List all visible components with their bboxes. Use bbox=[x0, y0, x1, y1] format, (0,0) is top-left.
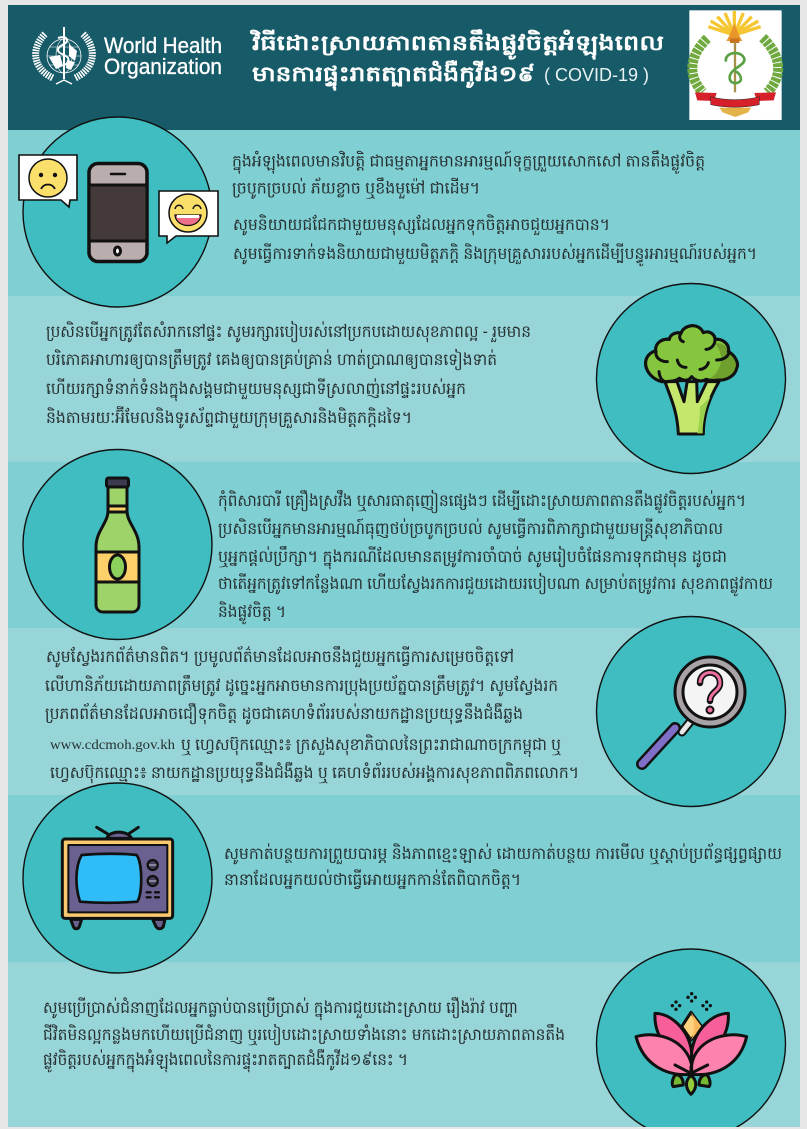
text block: get the facts: សូមស្វែងរកព័ត៌មានពិត។ ប្រមូលព័ត៌មានដែលអាចនឹងជួយអ្នកធ្វើការសម្រេចចិត្តទៅ bbox=[46, 645, 514, 668]
icon: Ministry of Health logo bbox=[689, 10, 782, 120]
text block: get the facts: ហ្វេសប៊ុកឈ្មោះ៖ នាយកដ្ឋានប្រយុទ្ធនឹងជំងឺឆ្លង ឬ គេហទំព័ររបស់អង្គការសុខភាពពិភពលោក។ bbox=[50, 761, 579, 784]
panel: talk to people bbox=[19, 117, 757, 307]
title: ( COVID-19 ) bbox=[544, 65, 649, 85]
title: វិធីដោះស្រាយភាពតានតឹងផ្លូវចិត្តអំឡុងពេល bbox=[249, 29, 664, 60]
panel: healthy lifestyle bbox=[46, 284, 786, 474]
text block: avoid alcohol: ឬអ្នកផ្តល់ប្រឹក្សា។ ក្នុងករណីដែលមានតម្រូវការចាំបាច់ សូមរៀបចំផែនការទុកជាមុន ដូចជា bbox=[218, 545, 727, 570]
text block: avoid alcohol: និងផ្លូវចិត្ត ។ bbox=[218, 601, 286, 625]
panel: limit media bbox=[23, 783, 782, 973]
text block: healthy lifestyle: ហើយរក្សាទំនាក់ទំនងក្នុងសង្គមជាមួយមនុស្សជាទីស្រលាញ់នៅផ្ទះរបស់អ្នក bbox=[46, 378, 466, 402]
text block: get the facts: www.cdcmoh.gov.kh bbox=[50, 738, 175, 753]
text block: get the facts: លើហានិភ័យដោយភាពត្រឹមត្រូវ ដូច្នេះអ្នកអាចមានការប្រុងប្រយ័ត្នបានត្រឹមត្រូវ។ សូមស្វែងរក bbox=[45, 674, 558, 697]
text block: use your skills: ជីវិតមិនល្អកន្លងមកហើយប្រើជំនាញ ឬរបៀបដោះស្រាយទាំងនោះ មកដោះស្រាយភាពតានតឹង bbox=[43, 1023, 565, 1046]
text block: healthy lifestyle: បរិភោគអាហារឲ្យបានត្រឹមត្រូវ គេងឲ្យបានគ្រប់គ្រាន់ ហាត់ប្រាណឲ្យបានទៀងទាត់ bbox=[46, 348, 497, 371]
icon: circle badge with television bbox=[23, 783, 212, 973]
panel: get the facts bbox=[45, 616, 786, 806]
text block: healthy lifestyle bbox=[46, 320, 531, 429]
text block: talk to people bbox=[232, 150, 757, 267]
text block: avoid alcohol bbox=[218, 489, 773, 625]
text block: talk to people: ច្របូកច្របល់ ភ័យខ្លាច ឬខឹងមួម៉ៅ ជាដើម។ bbox=[232, 176, 480, 200]
text block: talk to people: ក្នុងអំឡុងពេលមានវិបត្តិ ជាធម្មតាអ្នកមានអារម្មណ៍ទុក្ខព្រួយសោកសៅ តានតឹងផ្លូវចិត្ត bbox=[232, 150, 705, 174]
text block: get the facts: ឬ ហ្វេសប៊ុកឈ្មោះ៖ ក្រសួងសុខាភិបាលនៃព្រះរាជាណាចក្រកម្ពុជា ឬ bbox=[181, 734, 561, 758]
icon: sad face bubble bbox=[19, 155, 77, 207]
panel: use your skills bbox=[43, 949, 786, 1129]
text block: limit media bbox=[224, 842, 782, 890]
text block: talk to people: សូមនិយាយជជែកជាមួយមនុស្សដែលអ្នកទុកចិត្តអាចជួយអ្នកបាន។ bbox=[233, 214, 610, 236]
text: World Health Organization: Organization bbox=[104, 54, 222, 79]
icon: circle badge with magnifier bbox=[596, 616, 786, 806]
text: World Health Organization bbox=[104, 33, 222, 79]
text: World Health Organization: World Health bbox=[104, 33, 222, 58]
text block: use your skills: សូមប្រើប្រាស់ជំនាញដែលអ្នកធ្លាប់បានប្រើប្រាស់ ក្នុងការជួយដោះស្រាយ រឿងរ៉ាវ បញ្ហា bbox=[43, 996, 518, 1021]
text block: healthy lifestyle: និងតាមរយៈអ៊ីមែលនិងទូរស័ព្ទជាមួយក្រុមគ្រួសារនិងមិត្តភក្តិដទៃ។ bbox=[46, 406, 412, 429]
title: មានការផ្ទុះរាតត្បាតជំងឺកូវីដ១៩ bbox=[252, 60, 535, 91]
text block: use your skills: ផ្លូវចិត្តរបស់អ្នកក្នុងអំឡុងពេលនៃការផ្ទុះរាតត្បាតជំងឺកូវីដ១៩នេះ ។ bbox=[43, 1048, 408, 1073]
text block: avoid alcohol: កុំពិសារបារី គ្រឿងស្រវឹង ឬសារធាតុញៀនផ្សេងៗ ដើម្បីដោះស្រាយភាពតានតឹងផ្លូវចិត្តរបស់អ្នក។ bbox=[218, 489, 746, 514]
text block: use your skills bbox=[43, 996, 565, 1073]
text block: avoid alcohol: ប្រសិនបើអ្នកមានអារម្មណ៍ធុញថប់ច្របូកច្របល់ សូមធ្វើការពិភាក្សាជាមួយមន្រ្តីសុខាភិបាល bbox=[218, 518, 723, 542]
icon: smartphone bbox=[89, 164, 147, 262]
text block: healthy lifestyle: ប្រសិនបើអ្នកត្រូវតែសំរាកនៅផ្ទះ សូមរក្សារបៀបរស់នៅប្រកបដោយសុខភាពល្អ - រួមមាន bbox=[46, 320, 531, 343]
icon: happy face bubble bbox=[159, 191, 218, 243]
icon: circle badge with broccoli bbox=[596, 284, 786, 474]
text block: get the facts: ប្រភពព័ត៌មានដែលអាចជឿទុកចិត្ត ដូចជាគេហទំព័ររបស់នាយកដ្ឋានប្រយុទ្ធនឹងជំងឺឆ្លង bbox=[45, 702, 523, 725]
icon: circle badge with phone and chat bubbles bbox=[19, 117, 218, 307]
panel: header bbox=[8, 5, 800, 130]
text block: limit media: នានាដែលអ្នកយល់ថាធ្វើអោយអ្នកកាន់តែពិបាកចិត្ត។ bbox=[224, 869, 521, 890]
text block: talk to people: សូមធ្វើការទាក់ទងនិយាយជាមួយមិត្តភក្តិ និងក្រុមគ្រួសាររបស់អ្នកដើម្បីបន្ធូរអារម្មណ៍របស់អ្នក។ bbox=[233, 243, 757, 267]
text block: limit media: សូមកាត់បន្ថយការព្រួយបារម្ភ និងភាពខ្មេះឡាស់ ដោយកាត់បន្ថយ ការមើល ឬស្តាប់ប្រព័ន្ធផ្សព្វផ្សាយ bbox=[224, 842, 782, 865]
icon: circle badge with lotus bbox=[596, 949, 786, 1129]
icon: circle badge with bottle bbox=[23, 450, 212, 640]
text block: get the facts bbox=[45, 645, 579, 784]
icon: WHO emblem bbox=[36, 27, 92, 84]
panel: avoid alcohol bbox=[23, 450, 773, 640]
text block: avoid alcohol: ថាតើអ្នកត្រូវទៅកន្លែងណា ហើយស្វែងរកការជួយដោយរបៀបណា សម្រាប់តម្រូវការ សុខភាពផ្លូវកាយ bbox=[218, 572, 773, 597]
title bbox=[249, 29, 664, 91]
